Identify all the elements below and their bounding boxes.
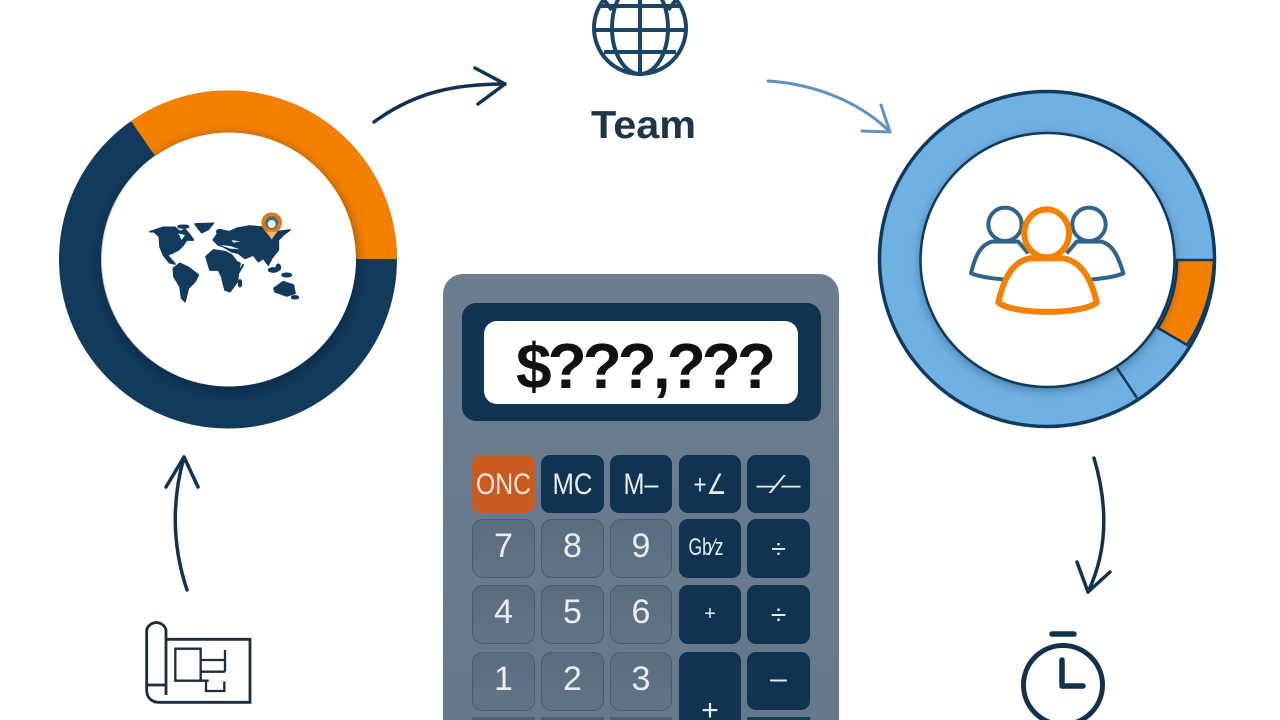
key: 6	[610, 586, 672, 644]
key: small plus	[679, 585, 741, 644]
display bezel	[462, 303, 821, 421]
icon: blueprint	[147, 623, 250, 702]
inner white disc	[102, 132, 356, 386]
ring: inner shadow	[920, 135, 1176, 391]
key: percent minus	[747, 455, 810, 513]
key: 7	[472, 520, 534, 578]
ring: navy segment	[80, 112, 376, 408]
key: 3	[610, 652, 672, 710]
key: small plus: +	[704, 603, 716, 625]
key: 2	[542, 652, 604, 710]
icon: location pin	[261, 212, 282, 239]
key: ONC	[472, 455, 535, 513]
calculator body	[443, 274, 839, 720]
key: 9	[610, 520, 672, 578]
key: 8	[542, 520, 604, 578]
key: divide top: ÷	[771, 534, 786, 564]
arrow: team to right ring	[768, 81, 890, 132]
ring: blue segment	[880, 92, 1214, 426]
person: centre	[998, 209, 1097, 312]
key: MC: MC	[552, 468, 592, 501]
panel: left donut ring with world map	[80, 90, 397, 408]
key: Gb: Gb⁄z	[688, 534, 724, 561]
ring: inner shadow	[100, 134, 358, 392]
key: 5	[542, 586, 604, 644]
ring: divider tick	[1117, 368, 1137, 398]
key: 4	[472, 586, 534, 644]
arrow: blueprint to left ring	[166, 457, 198, 590]
key: 4: 4	[494, 593, 513, 631]
arrow: right ring to timer	[1077, 458, 1110, 592]
panel: right donut ring with people	[880, 92, 1214, 426]
key: minus	[747, 652, 810, 710]
key: 5: 5	[563, 593, 582, 631]
key: plus angle: +∠	[694, 469, 726, 500]
key: 8: 8	[563, 527, 582, 565]
key: 1	[472, 652, 534, 710]
key: divide: ÷	[771, 599, 786, 630]
display value: $???,???	[516, 330, 776, 402]
key: plus angle	[679, 455, 741, 513]
key: 3: 3	[632, 660, 650, 698]
inner white disc	[920, 133, 1174, 387]
key: minus: –	[770, 662, 787, 695]
key: M-: M–	[624, 468, 659, 501]
key: percent minus: –⁄–	[756, 469, 801, 499]
heading: Team: Team	[591, 104, 696, 147]
key: Gb	[679, 519, 741, 578]
icon: team of people	[971, 208, 1123, 312]
key: 6: 6	[632, 593, 650, 631]
key: divide top	[747, 519, 810, 578]
key: ONC: ONC	[476, 468, 531, 501]
key: 7: 7	[494, 527, 513, 565]
key: tall plus	[679, 652, 741, 720]
person: left	[971, 208, 1028, 279]
icon: globe	[594, 0, 686, 74]
key: divide	[747, 585, 810, 644]
icon: world map	[150, 212, 298, 302]
arrow: left ring to team	[374, 68, 505, 122]
key: 9: 9	[632, 527, 650, 565]
icon: stopwatch	[1024, 634, 1102, 720]
key: 1: 1	[494, 660, 513, 698]
ring: orange segment	[1158, 260, 1214, 345]
key: M-	[610, 455, 672, 513]
person: right	[1067, 208, 1123, 279]
panel: calculator	[443, 274, 839, 720]
key: 2: 2	[563, 660, 582, 698]
bottom row keys	[472, 717, 810, 720]
key: MC	[541, 455, 604, 513]
display screen	[484, 321, 798, 404]
ring: orange segment	[131, 90, 397, 259]
